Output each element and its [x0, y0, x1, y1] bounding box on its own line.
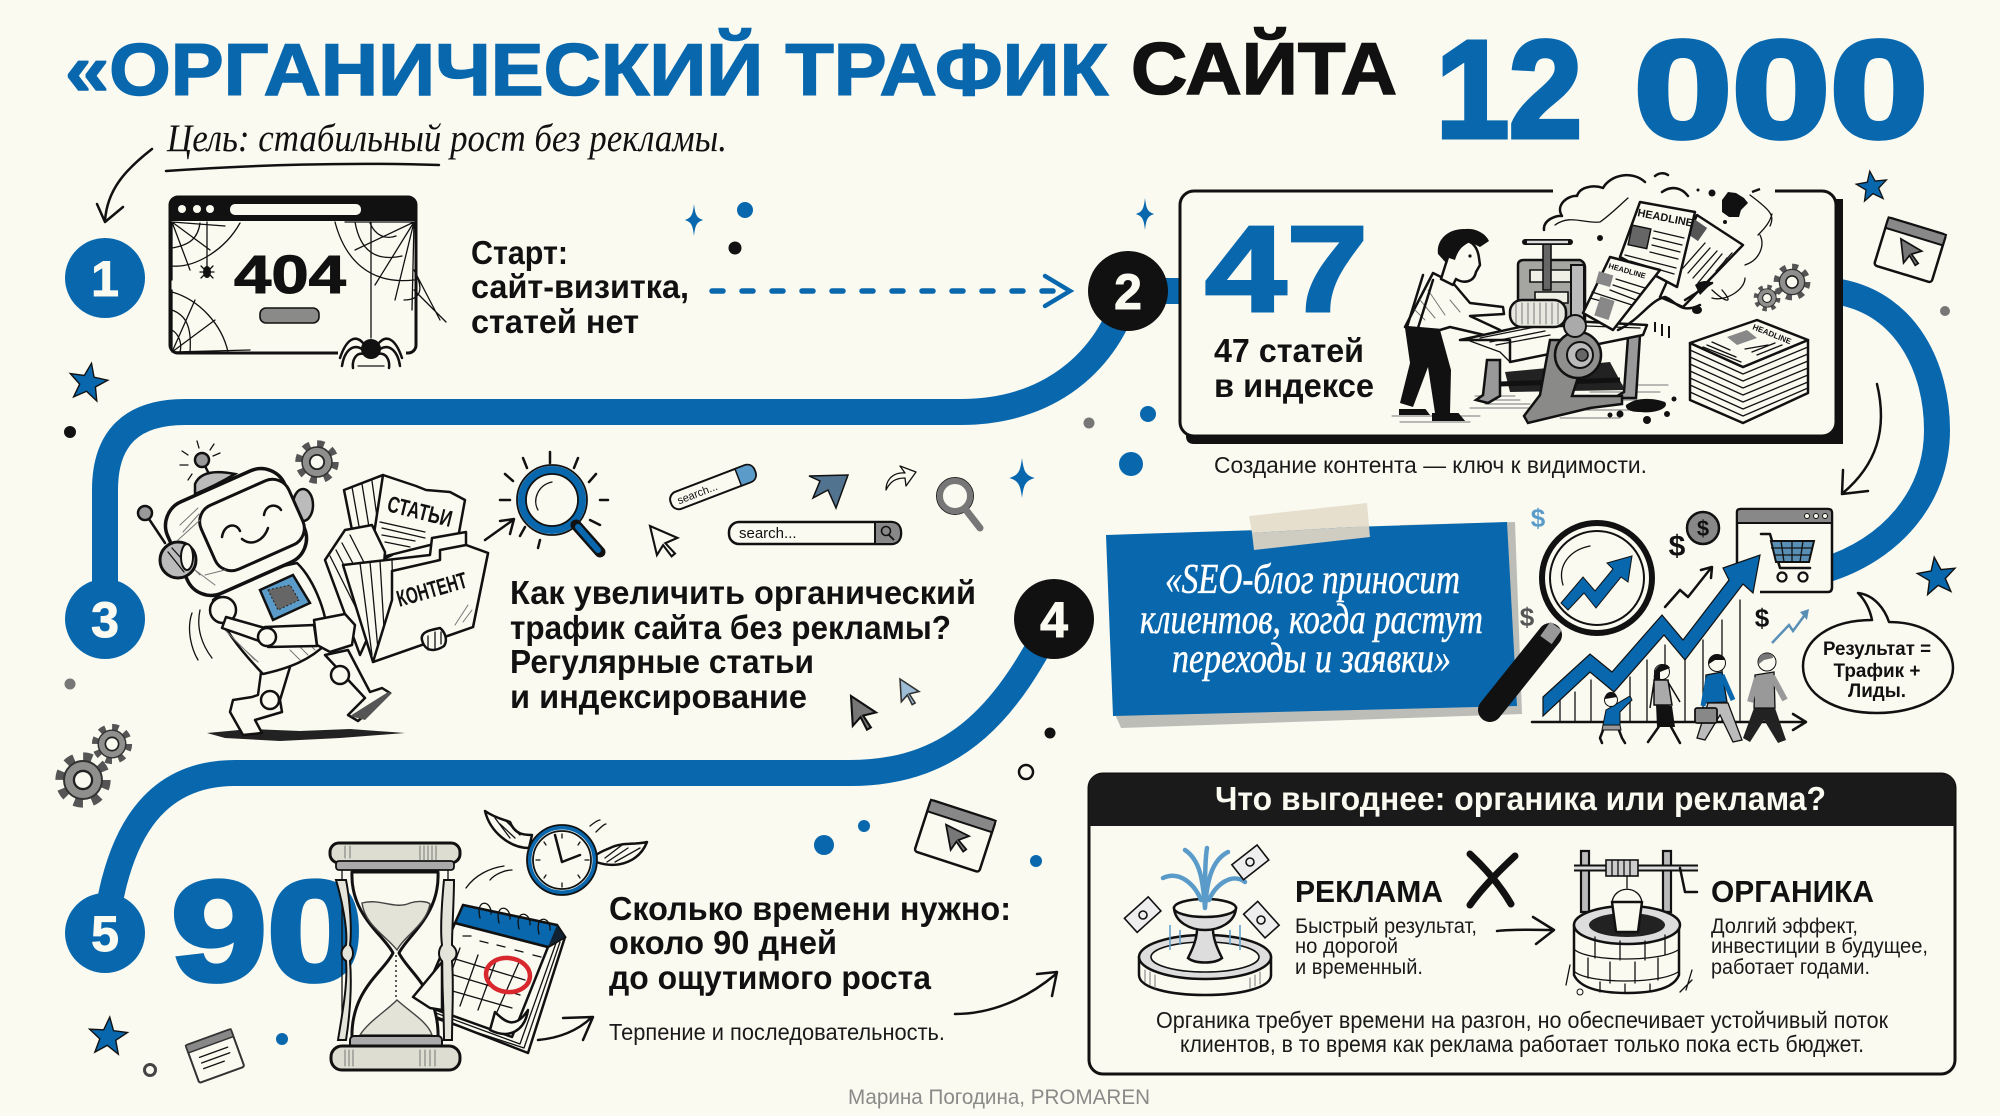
big number 12 000: 000 [1634, 13, 1928, 167]
people [1600, 653, 1786, 743]
step 4 badge: 4 [1040, 592, 1068, 648]
text: start: статей нет [471, 303, 639, 340]
icon: man at printing press [1392, 173, 1808, 424]
text: start: сайт-визитка, [471, 268, 689, 305]
road paths [105, 291, 1937, 933]
papers [1660, 215, 1743, 307]
speech bubble: result: Результат = [1823, 639, 1931, 660]
text: organic: работает годами. [1711, 956, 1870, 979]
step 1 badge [65, 238, 145, 318]
gear [299, 444, 335, 480]
text: articles in index [1214, 332, 1374, 404]
magnifier [1490, 635, 1550, 710]
text: how to grow: Регулярные статьи [510, 643, 814, 680]
man [1400, 328, 1451, 413]
text: ads: и временный. [1295, 956, 1423, 979]
tape [1249, 503, 1370, 550]
text: comparison summary: Органика требует времени на разгон, но обеспечивает устойчивый поток [1156, 1007, 1889, 1033]
speech bubble: result: Лиды. [1848, 681, 1906, 702]
text: organic: Долгий эффект, [1711, 915, 1858, 938]
legs [230, 665, 290, 735]
icon: man at printing press: HEADLINE [1607, 261, 1647, 280]
goal subtitle: Цель: стабильный рост без рекламы. [166, 117, 727, 160]
text: start: Старт: [471, 234, 568, 271]
decor: sparkles and dots top [685, 198, 1950, 498]
text: how to grow: и индексирование [510, 678, 807, 715]
arrow up [1543, 555, 1760, 716]
chart: growth arrow with magnifier and people: $ [1697, 516, 1709, 541]
chart: growth arrow with magnifier and people: $ [1755, 603, 1770, 633]
text: how long [609, 890, 1011, 996]
comparison header [1089, 774, 1955, 826]
icon: well [1566, 851, 1698, 995]
smoke [1544, 173, 1688, 230]
text: ads: Быстрый результат, [1295, 915, 1477, 938]
decor: bottom dots and browsers [88, 728, 1055, 1083]
step 5 badge: 5 [91, 906, 119, 962]
step 3 badge: 3 [91, 592, 119, 648]
step 5 badge [65, 893, 145, 973]
title: САЙТА [1131, 28, 1397, 110]
money symbols: $ [1531, 503, 1546, 533]
icon: 404 browser window with cobwebs: 404 [234, 245, 346, 305]
step 2 badge [1088, 251, 1168, 331]
icon: robot carrying folders [138, 441, 488, 741]
text: quote: «SEO-блог приносит [1165, 557, 1460, 603]
text: organic: инвестиции в будущее, [1711, 935, 1928, 958]
ink [1722, 192, 1748, 217]
text: organic: ОРГАНИКА [1711, 874, 1874, 909]
comparison header: Что выгоднее: органика или реклама? [1215, 780, 1826, 817]
icon: decorative search bars and cursors [648, 462, 980, 731]
icon: 404 browser window with cobwebs [170, 197, 446, 368]
text: how to grow [510, 574, 976, 715]
arrow to step 1 [97, 149, 152, 222]
text: how long: Сколько времени нужно: [609, 890, 1011, 927]
icon: flying clock [466, 811, 647, 895]
text: articles folder: СТАТЬИ [385, 491, 455, 532]
antennas [145, 460, 212, 543]
big number 12 000: 12 [1436, 13, 1582, 167]
text: organic [1711, 874, 1928, 979]
text: start [471, 234, 689, 340]
arrow: to comparison [955, 972, 1057, 1014]
icon: X mark [1470, 854, 1515, 905]
text: articles in index: в индексе [1214, 367, 1374, 404]
press [1505, 362, 1625, 392]
text: how long: около 90 дней [609, 924, 837, 961]
panel: 47 articles [1180, 173, 1843, 444]
icon: man at printing press: HEADLINE [1751, 323, 1793, 346]
text: quote [1140, 557, 1483, 682]
chart grid [1560, 600, 1740, 722]
decor: left side star and dots [61, 360, 128, 802]
text: content is key: Создание контента — ключ к видимости. [1214, 452, 1647, 478]
icon: man at printing press: HEADLINE [1636, 207, 1694, 230]
dashed arrow from 1 to 2 [712, 276, 1070, 306]
big number 90: 90 [171, 852, 363, 1011]
chart: growth arrow with magnifier and people: $ [1669, 530, 1686, 563]
step 3 badge [65, 579, 145, 659]
text: patience: Терпение и последовательность. [609, 1019, 945, 1045]
small black arrow [1665, 567, 1712, 607]
folder back [344, 475, 392, 570]
gears [1777, 267, 1807, 297]
arrow: right side curved [1842, 384, 1881, 494]
title: «ОРГАНИЧЕСКИЙ ТРАФИК [65, 29, 1108, 111]
decor: top-right star and browser [1855, 169, 1946, 283]
icon: fountain [1124, 845, 1279, 995]
text: comparison summary [1156, 1007, 1889, 1057]
step 1 badge: 1 [91, 251, 119, 307]
text: how long: до ощутимого роста [609, 959, 932, 996]
stack [1690, 340, 1808, 423]
text: ads: но дорогой [1295, 935, 1398, 958]
text: ads [1295, 874, 1477, 979]
speech bubble: result [1803, 593, 1953, 713]
torso [213, 563, 327, 674]
text: comparison summary: клиентов, в то время как реклама работает только пока есть бюджет. [1180, 1031, 1864, 1057]
callout: blue quote note [1106, 503, 1522, 728]
icon: hourglass [330, 843, 460, 1070]
text: quote: переходы и заявки» [1172, 636, 1451, 682]
arm and hands [210, 597, 236, 623]
footer credit: Марина Погодина, PROMAREN [848, 1086, 1150, 1109]
speech bubble: result: Трафик + [1834, 661, 1920, 682]
arrow: calendar to text [538, 1017, 593, 1040]
text: articles in index: 47 статей [1214, 332, 1364, 369]
axis [1532, 714, 1806, 730]
decor: right star [1915, 555, 1958, 596]
big number 12 000 [1436, 13, 1928, 167]
icon: calendar [420, 903, 565, 1053]
text: content folder: КОНТЕНТ [394, 567, 470, 612]
panel: comparison [1089, 774, 1955, 1074]
text: ads: РЕКЛАМА [1295, 874, 1443, 909]
number 47: 47 [1205, 201, 1368, 337]
ear right and head [293, 489, 313, 521]
cart browser [1737, 508, 1832, 592]
chart: growth arrow with magnifier and people [1490, 503, 1832, 743]
small blue arrow [1772, 612, 1807, 643]
icon: decorative search bars and cursors: search... [676, 481, 719, 507]
text: quote: клиентов, когда растут [1140, 597, 1483, 643]
icon: blue magnifier with rays [485, 452, 608, 552]
text: how to grow: трафик сайта без рекламы? [510, 609, 951, 646]
icon: decorative search bars and cursors: search... [739, 525, 797, 542]
arrow: ads to organic [1497, 917, 1554, 944]
step 4 badge [1014, 579, 1094, 659]
chart: growth arrow with magnifier and people: $ [1520, 602, 1535, 632]
text: how to grow: Как увеличить органический [510, 574, 976, 611]
step 2 badge: 2 [1114, 264, 1142, 320]
